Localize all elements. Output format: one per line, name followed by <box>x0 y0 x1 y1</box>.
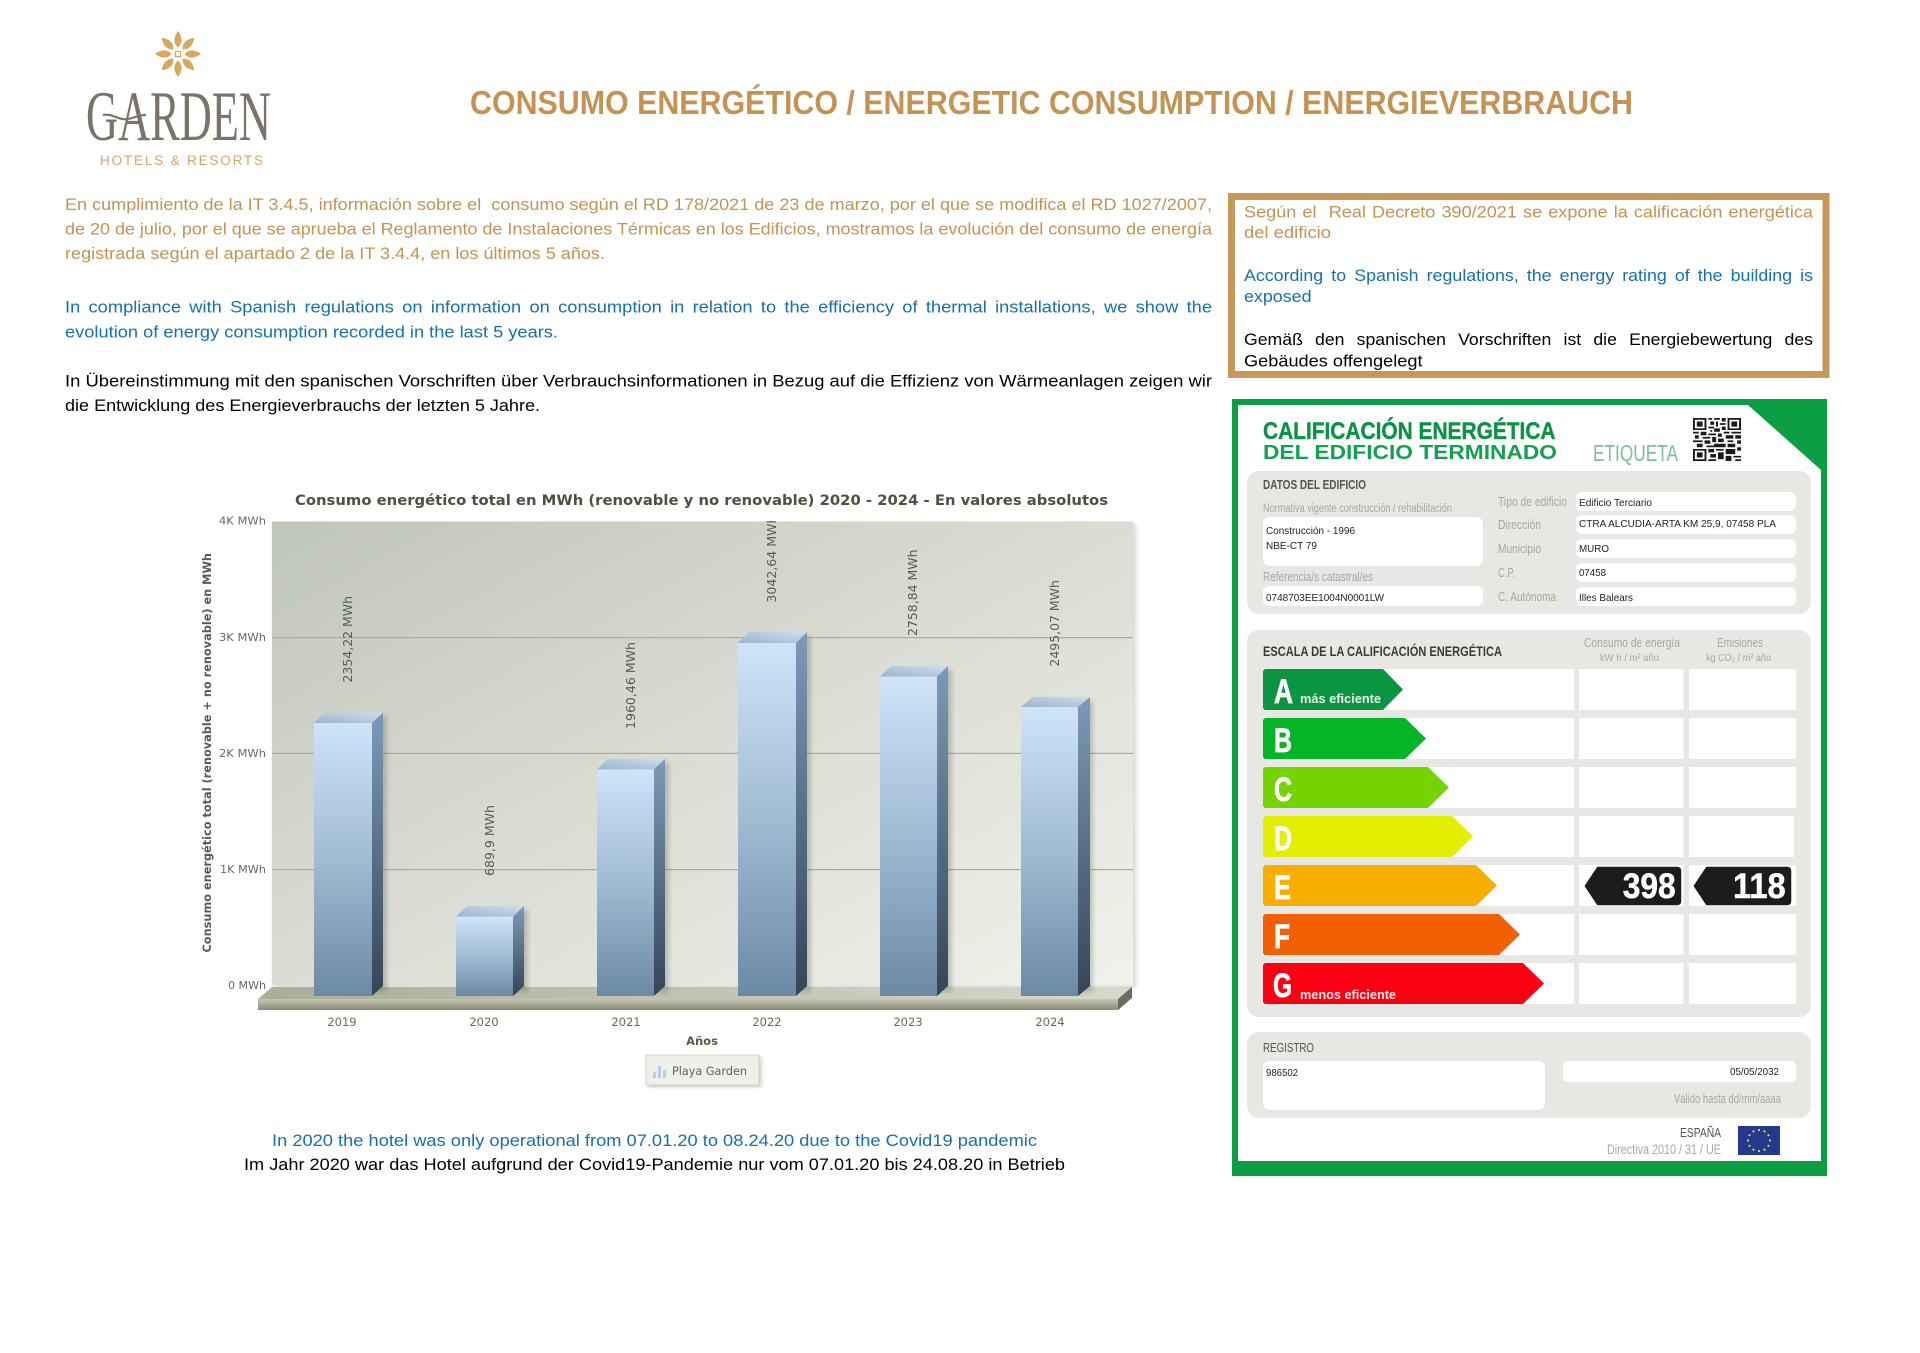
panel: building data: CTRA ALCUDIA-ARTA KM 25,9, 07458 PLA <box>1579 518 1776 530</box>
panel: building data: Referencia/s catastral/es <box>1263 569 1373 584</box>
badge: emissions 118: 118 <box>1733 867 1786 906</box>
x axis labels: 2019 <box>327 1015 357 1029</box>
x axis labels <box>327 1015 1065 1029</box>
panel: regulation note <box>1232 196 1826 374</box>
bar value labels: 1960,46 MWh <box>624 642 638 729</box>
panel: registration: REGISTRO <box>1263 1040 1314 1055</box>
y axis title: Consumo energético total (renovable + no renovable) en MWh <box>200 553 214 952</box>
panel: registration <box>1247 1032 1811 1118</box>
country and directive: Directiva 2010 / 31 / UE <box>1607 1141 1721 1157</box>
bar: 2023 <box>880 666 952 996</box>
rating arrow F: F <box>1274 918 1290 956</box>
text block: Spanish introduction: registrada según el apartado 2 de la IT 3.4.4, en los últimos 5 años. <box>65 244 605 263</box>
panel: building data: Tipo de edificio <box>1498 494 1567 509</box>
scale rows <box>1263 669 1796 1004</box>
panel: rating scale: ESCALA DE LA CALIFICACIÓN ENERGÉTICA <box>1263 644 1502 659</box>
panel: building data: Edificio Terciario <box>1579 497 1652 509</box>
rating arrow A: más eficiente <box>1300 691 1381 706</box>
note in English <box>1244 266 1813 306</box>
badge: energy consumption 398: 398 <box>1623 867 1676 906</box>
bar value labels <box>341 516 1062 876</box>
rating arrow D: D <box>1274 820 1292 858</box>
x axis labels: 2020 <box>469 1015 499 1029</box>
panel: building data: MURO <box>1579 543 1609 555</box>
badge: energy consumption 398 <box>1586 867 1680 906</box>
badge: emissions 118 <box>1695 867 1790 906</box>
bar: 2020 <box>456 906 528 996</box>
rating arrow A <box>1263 669 1403 711</box>
panel: building data: DATOS DEL EDIFICIO <box>1263 478 1366 492</box>
rating arrow F <box>1263 914 1520 956</box>
x axis labels: 2023 <box>893 1015 923 1029</box>
text block: German introduction <box>65 372 1212 415</box>
panel: energy rating label <box>1232 399 1827 1176</box>
rating arrow C <box>1263 767 1449 809</box>
logo: Garden Hotels & Resorts <box>86 31 271 168</box>
country and directive <box>1607 1125 1721 1157</box>
bar value labels: 2758,84 MWh <box>906 549 920 636</box>
rating arrow E <box>1263 865 1497 907</box>
label heading: CALIFICACIÓN ENERGÉTICA <box>1263 417 1556 445</box>
y axis labels: 4K MWh <box>219 514 266 528</box>
bar: 2022 <box>738 632 811 996</box>
panel: building data: C. Autónoma <box>1498 589 1557 604</box>
x axis labels: 2021 <box>611 1015 641 1029</box>
bar: 2021 <box>597 759 669 996</box>
note in Spanish: Según el Real Decreto 390/2021 se expone la calificación energética <box>1244 202 1814 222</box>
label heading <box>1263 417 1557 464</box>
panel: building data: NBE-CT 79 <box>1266 540 1317 552</box>
panel: rating scale: kW h / m² año <box>1600 652 1659 664</box>
footnote in English: In 2020 the hotel was only operational from 07.01.20 to 08.24.20 due to the Covid19 pandemic <box>272 1131 1038 1150</box>
rating arrow B: B <box>1274 722 1292 760</box>
bar value labels: 3042,64 MWh <box>765 516 779 603</box>
country and directive: ESPAÑA <box>1680 1125 1721 1140</box>
text block: Spanish introduction: de 20 de julio, por el que se aprueba el Reglamento de Instalaciones Térmicas en los Edificios, mostramos la evolución del consumo de energía <box>65 220 1213 238</box>
panel: registration: 05/05/2032 <box>1730 1066 1779 1078</box>
text block: Spanish introduction <box>65 195 1213 263</box>
panel: rating scale: kg CO₂ / m² año <box>1706 652 1771 664</box>
panel: building data: Construcción - 1996 <box>1266 525 1355 537</box>
etiqueta label: ETIQUETA <box>1593 440 1678 466</box>
logo swash <box>103 115 146 119</box>
bar chart: energy consumption 2019-2024 <box>200 493 1136 1087</box>
panel: building data: Dirección <box>1498 517 1541 532</box>
bar value labels: 2354,22 MWh <box>341 596 355 682</box>
legend: Playa Garden <box>672 1064 747 1078</box>
footnote in German: Im Jahr 2020 war das Hotel aufgrund der Covid19-Pandemie nur vom 07.01.20 bis 24.08.20 in Betrieb <box>244 1155 1065 1174</box>
note in English: According to Spanish regulations, the energy rating of the building is <box>1244 266 1813 285</box>
y axis labels: 0 MWh <box>228 979 266 992</box>
text block: German introduction: In Übereinstimmung mit den spanischen Vorschriften über Verbrauchsinformationen in Bezug auf die Effizienz von Wärmeanlagen zeigen wir <box>65 372 1212 390</box>
chart floor <box>258 987 1132 1010</box>
bar value labels: 689,9 MWh <box>483 805 497 876</box>
text block: English introduction: In compliance with Spanish regulations on information on consumption in relation to the efficiency of thermal installations, we show the <box>65 298 1212 316</box>
panel: rating scale: Consumo de energía <box>1584 635 1681 650</box>
logo tagline: HOTELS & RESORTS <box>100 153 263 168</box>
note in Spanish <box>1244 202 1814 242</box>
note in German: Gebäudes offengelegt <box>1244 352 1423 370</box>
bar value labels: 2495,07 MWh <box>1048 580 1062 667</box>
rating arrow E: E <box>1274 869 1291 907</box>
text block: Spanish introduction: En cumplimiento de la IT 3.4.5, información sobre el consumo según el RD 178/2021 de 23 de marzo, por el que se modifica el RD 1027/2007, <box>65 195 1212 214</box>
panel: building data: C.P. <box>1498 565 1515 580</box>
plot background <box>272 522 1136 988</box>
icon: EU flag <box>1738 1126 1780 1155</box>
y axis labels <box>219 514 266 992</box>
panel: building data: 0748703EE1004N0001LW <box>1266 592 1384 604</box>
panel: registration: 986502 <box>1266 1067 1298 1079</box>
bar: 2019 <box>314 712 387 996</box>
panel: building data <box>1247 471 1811 614</box>
panel: registration: Válido hasta dd/mm/aaaa <box>1674 1091 1782 1106</box>
panel: rating scale <box>1247 630 1811 1017</box>
rating arrow D <box>1263 816 1473 858</box>
note in English: exposed <box>1244 287 1312 306</box>
note in German <box>1244 330 1813 370</box>
logo wordmark: GARDEN <box>86 78 271 156</box>
chart title: Consumo energético total en MWh (renovable y no renovable) 2020 - 2024 - En valores absolutos <box>295 493 1108 509</box>
panel: rating scale: Emisiones <box>1717 635 1763 650</box>
x axis title: Años <box>686 1034 718 1048</box>
note in Spanish: del edificio <box>1244 223 1331 242</box>
rating arrow G: menos eficiente <box>1300 987 1396 1002</box>
y axis labels: 3K MWh <box>219 631 266 644</box>
x axis labels: 2024 <box>1035 1015 1065 1029</box>
y axis labels: 2K MWh <box>219 747 266 760</box>
note in German: Gemäß den spanischen Vorschriften ist die Energiebewertung des <box>1244 330 1813 349</box>
title: CONSUMO ENERGÉTICO / ENERGETIC CONSUMPTION / ENERGIEVERBRAUCH <box>470 84 1633 121</box>
rating arrow A: A <box>1274 673 1293 711</box>
rating arrow C: C <box>1274 771 1292 809</box>
rating arrow B <box>1263 718 1426 760</box>
icon: QR code <box>1693 418 1741 461</box>
bar: 2024 <box>1021 697 1093 996</box>
panel: building data: 07458 <box>1579 567 1606 579</box>
icon: gold flower <box>155 31 201 77</box>
legend <box>646 1055 761 1087</box>
x axis labels: 2022 <box>752 1015 782 1029</box>
rating arrow G <box>1263 963 1544 1005</box>
y axis labels: 1K MWh <box>220 863 266 876</box>
text block: English introduction: evolution of energy consumption recorded in the last 5 years. <box>65 322 558 342</box>
text block: German introduction: die Entwicklung des Energieverbrauchs der letzten 5 Jahre. <box>65 396 540 415</box>
rating arrow G: G <box>1273 967 1292 1005</box>
label heading: DEL EDIFICIO TERMINADO <box>1263 441 1557 464</box>
panel: building data: Normativa vigente construcción / rehabilitación <box>1263 503 1452 515</box>
panel: building data: Municipio <box>1498 541 1541 556</box>
text block: English introduction <box>65 298 1212 342</box>
panel: building data: Illes Balears <box>1579 592 1633 604</box>
